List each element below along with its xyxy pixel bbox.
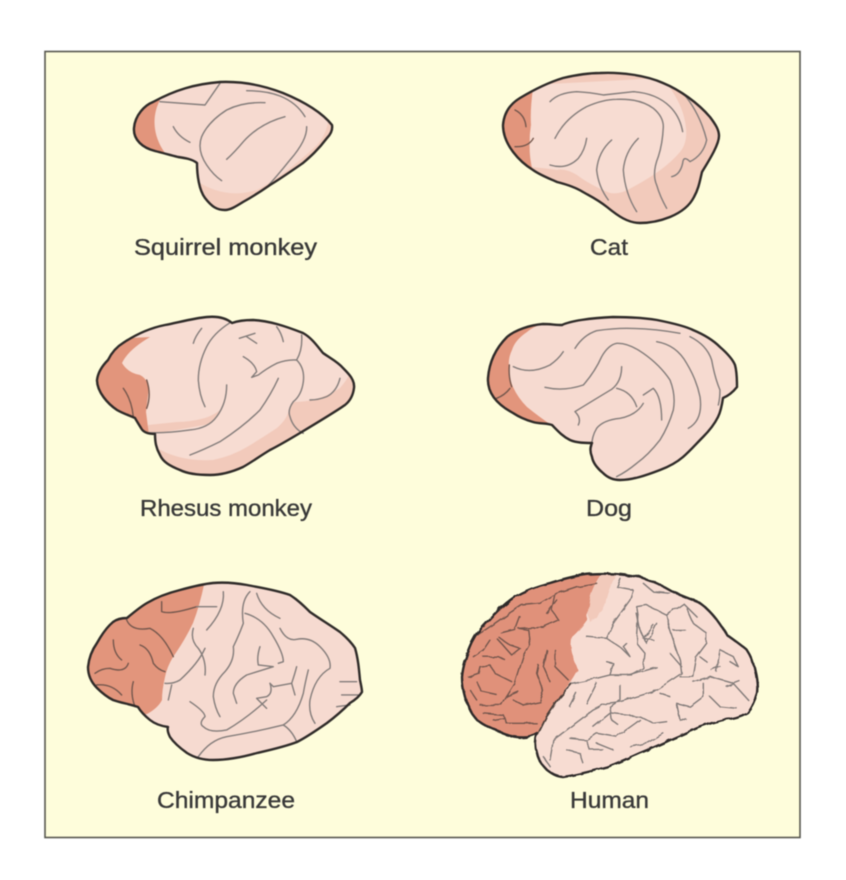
brain: cat [495, 73, 719, 223]
brain: rhesus monkey [90, 317, 363, 487]
brain: squirrel monkey [132, 80, 334, 212]
sulci: frontal lobe [468, 583, 597, 723]
label: cat: Cat [590, 234, 628, 260]
brain: chimpanzee [80, 580, 362, 760]
label: squirrel monkey: Squirrel monkey [134, 234, 317, 260]
label: chimpanzee: Chimpanzee [157, 787, 295, 813]
brain: human [455, 570, 757, 777]
label: rhesus monkey: Rhesus monkey [140, 495, 312, 521]
brain: dog [480, 315, 737, 480]
label: dog: Dog [586, 495, 632, 521]
label: human: Human [570, 787, 649, 813]
panel: cream background [45, 52, 800, 838]
sulci: parietal, temporal and occipital lobes [537, 578, 748, 767]
